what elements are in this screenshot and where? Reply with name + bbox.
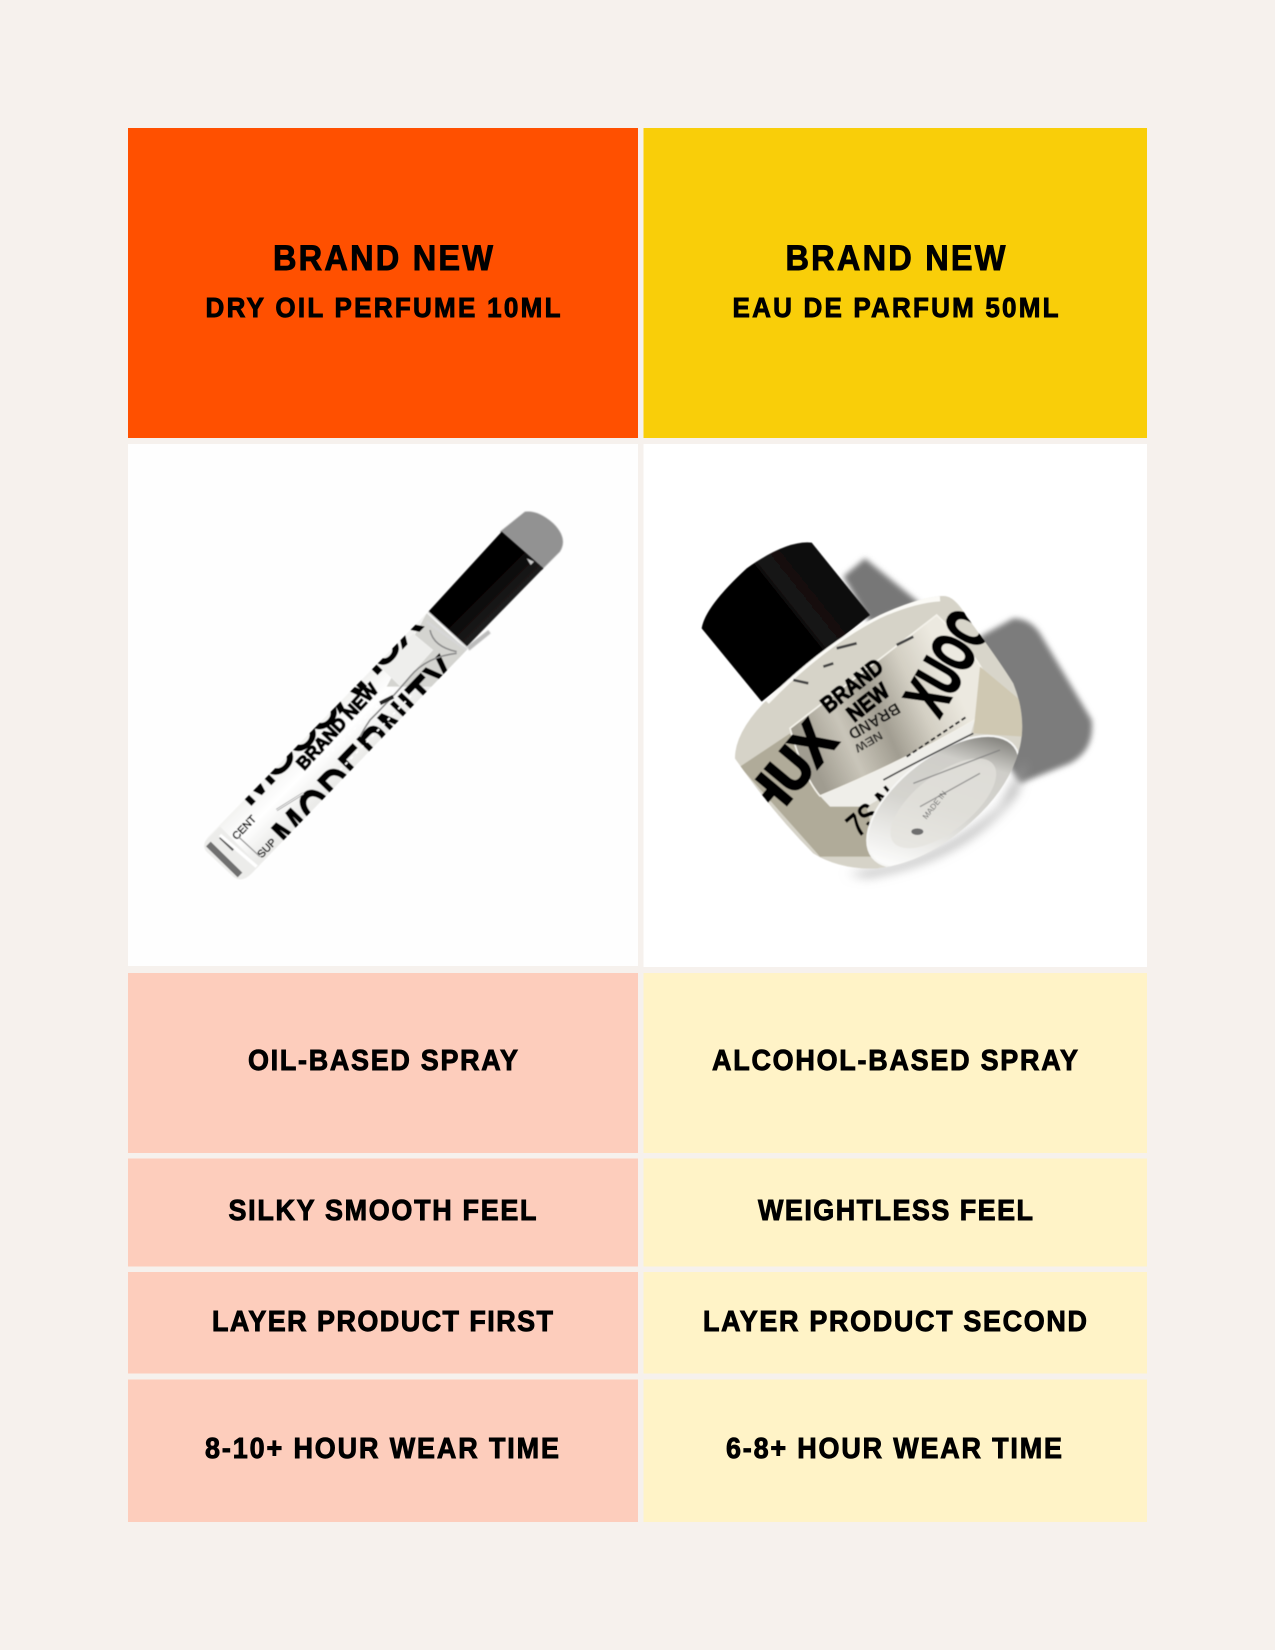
text: silky smooth feel: SILKY SMOOTH FEEL	[228, 1194, 537, 1226]
label: brand new on bottle	[815, 653, 903, 756]
panel: feel comparison, oil	[128, 1158, 638, 1266]
text: weightless feel: WEIGHTLESS FEEL	[758, 1194, 1033, 1226]
text: oil-based spray: OIL-BASED SPRAY	[248, 1044, 518, 1076]
panel: base comparison, oil	[128, 973, 638, 1153]
icon: roll-on perfume tube: MODERNITY	[260, 644, 481, 870]
label: brand new on bottle: NEW	[841, 677, 895, 727]
panel: wear time comparison, alcohol	[644, 1380, 1147, 1522]
subheading: eau de parfum 50ml: EAU DE PARFUM 50ML	[733, 292, 1058, 323]
icon: eau de parfum bottle: HUX	[732, 710, 849, 833]
heading: brand new: BRAND NEW	[785, 239, 1006, 278]
panel: dry oil perfume header	[128, 128, 638, 438]
panel: layering comparison, alcohol	[644, 1272, 1147, 1374]
icon: eau de parfum bottle	[702, 542, 1092, 893]
icon: roll-on perfume tube: CENT	[230, 813, 259, 843]
text: alcohol-based spray: ALCOHOL-BASED SPRAY	[712, 1044, 1078, 1076]
panel: eau de parfum header	[644, 128, 1147, 438]
icon: roll-on perfume tube: MOCCAHUX	[217, 595, 433, 816]
subheading: dry oil perfume 10ml: DRY OIL PERFUME 10ML	[206, 292, 560, 323]
panel: layering comparison, oil	[128, 1272, 638, 1374]
text: 8-10+ hour wear time: 8-10+ HOUR WEAR TIME	[205, 1432, 559, 1464]
panel: dry oil perfume photo	[128, 444, 638, 966]
icon: roll-on perfume tube: SUP	[255, 837, 279, 861]
icon: roll-on perfume tube	[193, 511, 563, 893]
label: brand new on bottle: NEW	[852, 728, 885, 756]
panel: feel comparison, alcohol	[644, 1158, 1147, 1266]
label: brand new on tube: BRAND NEW	[292, 680, 382, 774]
icon: eau de parfum bottle: MADE IN	[921, 789, 949, 821]
icon: eau de parfum bottle: 7S N	[840, 780, 907, 844]
panel: base comparison, alcohol	[644, 973, 1147, 1153]
heading: brand new: BRAND NEW	[273, 239, 493, 278]
label: brand new on bottle: BRAND	[815, 653, 888, 718]
label: brand new on bottle: BRAND	[845, 699, 903, 742]
icon: eau de parfum bottle: XUOO	[892, 599, 1004, 725]
text: layer product first: LAYER PRODUCT FIRST	[212, 1305, 553, 1337]
text: 6-8+ hour wear time: 6-8+ HOUR WEAR TIME	[726, 1432, 1062, 1464]
panel: eau de parfum photo	[644, 444, 1147, 967]
text: layer product second: LAYER PRODUCT SECOND	[703, 1305, 1087, 1337]
panel: wear time comparison, oil	[128, 1380, 638, 1522]
